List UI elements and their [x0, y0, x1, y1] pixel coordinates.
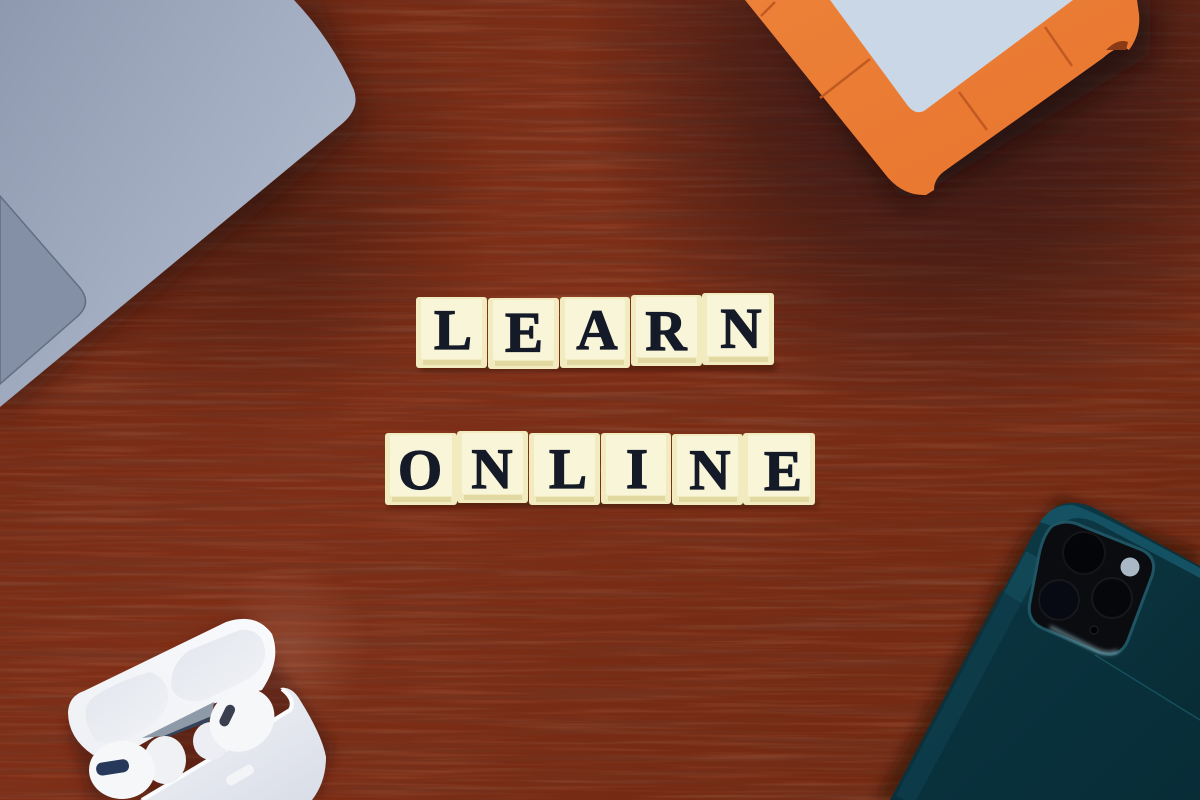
case base — [140, 688, 326, 800]
word LEARN tiles — [416, 293, 776, 370]
right earbud — [193, 675, 287, 787]
lens 1 — [1063, 532, 1105, 574]
tile I: I — [626, 438, 648, 501]
tile O: O — [398, 439, 442, 502]
laptop corner — [0, 0, 365, 420]
left earbud — [89, 736, 186, 799]
tile L: L — [434, 299, 472, 362]
phone in teal case — [875, 495, 1200, 800]
tile O — [385, 433, 457, 505]
lens 3 — [1092, 578, 1132, 618]
flash — [1120, 558, 1140, 576]
tile R: R — [645, 300, 687, 363]
drive light panel — [830, 0, 1073, 112]
tile E: E — [764, 440, 802, 503]
tile L — [529, 433, 600, 505]
tile N — [457, 431, 528, 503]
drive grooves — [761, 2, 1072, 130]
tile N: N — [720, 298, 762, 360]
lighter lower panel edge — [890, 590, 1200, 800]
tile E — [488, 298, 559, 369]
tile L — [416, 297, 487, 368]
open lid — [68, 619, 275, 755]
tile N — [702, 293, 774, 365]
tile A — [560, 297, 630, 368]
lid well left — [86, 672, 168, 743]
lens 2 — [1039, 580, 1079, 620]
word ONLINE tiles — [385, 431, 818, 507]
tile N: N — [689, 439, 731, 502]
AirPods case — [66, 615, 335, 800]
tile A: A — [576, 299, 618, 362]
tile E: E — [505, 302, 543, 364]
microphone — [1090, 626, 1098, 634]
tile N: N — [471, 438, 513, 501]
camera module — [1029, 522, 1154, 654]
laptop trackpad — [0, 196, 86, 384]
tile E — [743, 433, 815, 505]
orange rugged hard drive — [745, 0, 1150, 205]
tile L: L — [549, 438, 587, 501]
tile I — [601, 433, 671, 504]
tile N — [672, 434, 743, 505]
lid well right — [171, 630, 265, 701]
tile R — [631, 295, 702, 366]
